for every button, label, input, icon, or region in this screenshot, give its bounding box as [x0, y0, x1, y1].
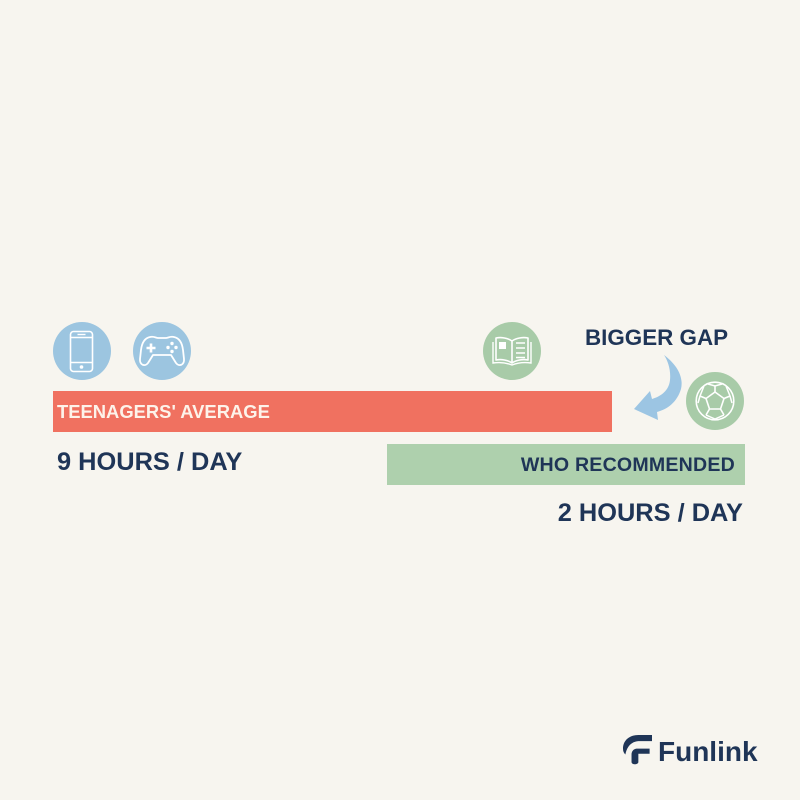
icon: soccer ball — [686, 372, 744, 430]
arrow: curved gap arrow — [634, 355, 682, 420]
icon: open book — [483, 322, 541, 380]
icon: game controller — [133, 322, 191, 380]
bar: WHO recommended — [387, 444, 745, 485]
logo: Funlink — [623, 735, 758, 767]
value: 2 hours / day: 2 HOURS / DAY — [558, 499, 743, 527]
heading: bigger gap: BIGGER GAP — [585, 325, 728, 350]
logo wordmark: Funlink — [658, 736, 758, 767]
icon: smartphone — [53, 322, 111, 380]
value: 9 hours / day: 9 HOURS / DAY — [57, 448, 242, 476]
logo mark — [623, 735, 652, 764]
label: WHO recommended: WHO RECOMMENDED — [521, 454, 735, 476]
label: teenagers' average: TEENAGERS' AVERAGE — [57, 401, 270, 422]
bar: teenagers' average — [53, 391, 612, 432]
